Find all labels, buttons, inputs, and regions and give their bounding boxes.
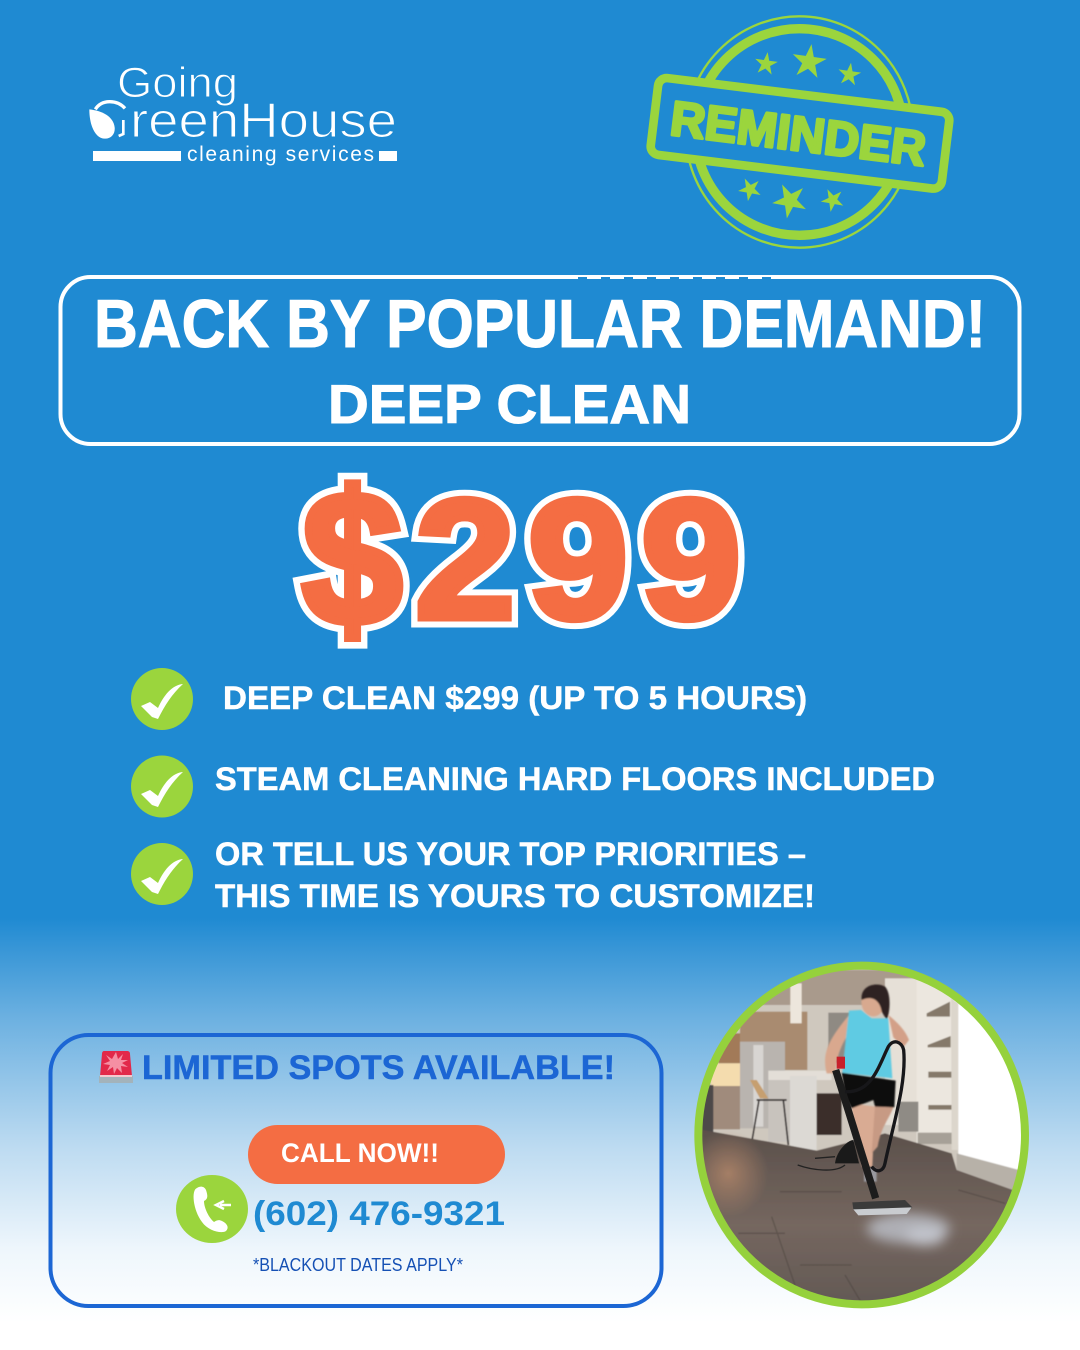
photo ring [698, 966, 1025, 1304]
price outline: 2 [415, 465, 515, 655]
logo bar right [379, 151, 397, 161]
stamp: reminder [650, 16, 950, 248]
panel heading: LIMITED SPOTS AVAILABLE! [142, 1049, 615, 1087]
call button [248, 1125, 505, 1184]
price outline [302, 454, 741, 665]
cleaner [825, 984, 909, 1182]
icon: phone [176, 1175, 248, 1243]
panel frame [50, 1035, 662, 1306]
price outline: $ [302, 454, 402, 665]
photo: cleaner steaming floor in round frame [694, 962, 1029, 1308]
item one [131, 668, 807, 730]
price fill [302, 454, 741, 665]
item three [131, 836, 815, 914]
logo word: Going: Going [117, 59, 238, 107]
headline line one: BACK BY POPULAR DEMAND! [94, 286, 986, 362]
logo: Going GreenHouse cleaning services [89, 59, 397, 166]
steam mop [836, 1042, 912, 1215]
icon: siren [99, 1051, 133, 1083]
price outline: 9 [528, 465, 628, 655]
headline box [60, 277, 1020, 444]
logo tagline: cleaning services [187, 143, 374, 166]
price fill: 9 [528, 465, 628, 655]
headline frame [60, 277, 1020, 444]
steam [867, 1213, 950, 1246]
panel: limited spots call to action [50, 1035, 662, 1306]
logo icon: leaf G [89, 102, 125, 139]
item text line two: THIS TIME IS YOURS TO CUSTOMIZE! [215, 878, 815, 914]
room background [702, 970, 1021, 1300]
headline line two: DEEP CLEAN [328, 373, 691, 435]
item text: STEAM CLEANING HARD FLOORS INCLUDED [215, 761, 935, 797]
disclaimer: *BLACKOUT DATES APPLY* [253, 1255, 463, 1275]
stamp outer ring [686, 16, 913, 248]
item text: DEEP CLEAN $299 (UP TO 5 HOURS) [223, 680, 807, 716]
price fill: $ [302, 454, 402, 665]
stamp stars [737, 42, 862, 221]
stamp inner ring [695, 29, 903, 235]
check icon [131, 668, 193, 730]
checklist [131, 668, 935, 914]
logo bar left [93, 151, 181, 161]
price [302, 454, 741, 665]
price fill: 2 [415, 465, 515, 655]
check icon [131, 756, 193, 818]
price outline: 9 [641, 465, 741, 655]
item text line one: OR TELL US YOUR TOP PRIORITIES – [215, 836, 806, 872]
steam cleaner canister [798, 1057, 859, 1170]
item two [131, 756, 935, 818]
call button: CALL NOW!! [281, 1138, 439, 1168]
logo word: reenHouse: reenHouse [130, 94, 397, 148]
price fill: 9 [641, 465, 741, 655]
check icon [131, 843, 193, 905]
stamp banner [650, 77, 950, 190]
phone number: (602) 476-9321 [253, 1195, 505, 1233]
stamp word: REMINDER [668, 92, 929, 177]
